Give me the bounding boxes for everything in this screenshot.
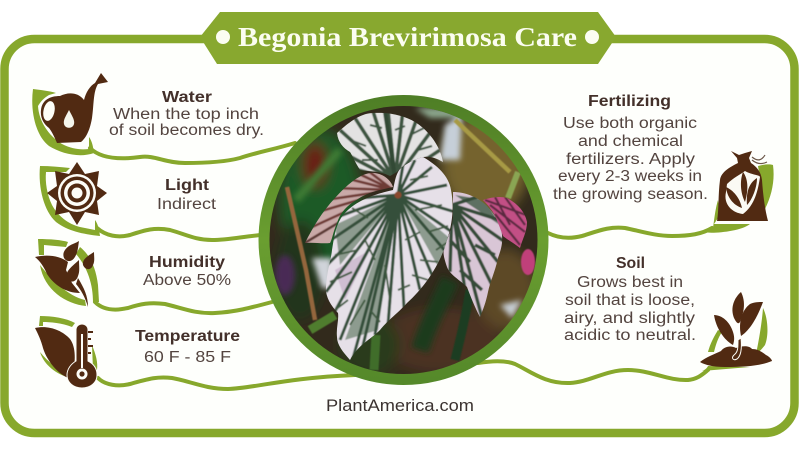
sprout leaf: right <box>740 302 763 336</box>
heading: Fertilizing <box>588 93 671 110</box>
drop 2 <box>67 260 79 282</box>
central plant photo <box>258 95 548 385</box>
green leaf outline <box>40 166 100 236</box>
wave: soil <box>478 361 708 383</box>
stem <box>76 278 88 307</box>
body: 60 F - 85 F <box>144 349 231 366</box>
text: soil: soil that is loose, <box>565 292 695 309</box>
leaf <box>35 327 75 378</box>
text: light <box>157 177 217 213</box>
leaf: main <box>326 157 453 360</box>
text: fertilizing: the growing season. <box>553 186 708 203</box>
green leaf outline <box>704 164 774 233</box>
sack rope <box>752 155 767 164</box>
wave: temperature <box>98 375 355 389</box>
green leaf outline <box>39 316 97 378</box>
banner dot left <box>216 30 230 44</box>
photo stems <box>287 120 518 370</box>
leaf: pink lower <box>521 249 535 275</box>
leaf <box>35 256 80 293</box>
leaf: pink <box>483 197 527 248</box>
text: fertilizing: every 2-3 weeks in <box>558 168 702 185</box>
water drop <box>64 110 74 128</box>
text: fertilizing: fertilizers. Apply <box>566 151 695 168</box>
can body <box>41 73 108 143</box>
photo ring <box>264 101 542 379</box>
wave: water <box>90 143 295 163</box>
wave: light <box>97 228 262 240</box>
wave: humidity <box>95 302 272 313</box>
icon: temperature <box>35 316 97 388</box>
leaf veins <box>326 160 455 362</box>
body: Above 50% <box>143 272 231 289</box>
green leaf outline <box>32 89 94 155</box>
thermometer <box>67 324 97 388</box>
text: humidity <box>143 254 231 289</box>
text: soil <box>564 255 696 344</box>
body: Use both organic <box>563 115 697 132</box>
title banner <box>200 12 616 64</box>
text: fertilizing: and chemical <box>578 133 683 150</box>
sprout leaf: left <box>714 315 734 345</box>
green leaf outline <box>702 308 767 371</box>
drop 3 <box>83 252 94 269</box>
plant leaves <box>726 172 757 208</box>
website credit: PlantAmerica.com <box>326 396 474 415</box>
can handle hole <box>42 100 56 122</box>
banner shape <box>200 12 616 64</box>
heading: Soil <box>616 255 645 272</box>
white plant patch <box>725 171 760 214</box>
leaf center <box>394 192 402 198</box>
sun rings <box>58 174 96 212</box>
body: Indirect <box>157 196 217 213</box>
icon: humidity <box>35 239 99 307</box>
icon: sun <box>40 162 107 236</box>
heading: Humidity <box>149 254 225 271</box>
banner dot right <box>585 30 599 44</box>
icon: soil sprout <box>700 292 772 371</box>
heading: Light <box>165 177 210 194</box>
photo background blobs <box>270 106 538 374</box>
text: temperature <box>135 328 240 366</box>
body: Grows best in <box>577 274 683 291</box>
leaf: upper <box>337 112 443 176</box>
photo scene <box>270 106 538 374</box>
wave: fertilizing <box>548 228 712 238</box>
thermometer bulb and tube <box>81 334 83 368</box>
thermometer ticks <box>88 331 93 354</box>
leaf: left pink <box>305 172 393 244</box>
green leaf outline <box>38 239 99 306</box>
icon: water can <box>32 73 108 155</box>
text: soil: acidic to neutral. <box>564 327 696 344</box>
text: water: of soil becomes dry. <box>109 122 264 139</box>
heading: Temperature <box>135 328 240 345</box>
drop 1 <box>63 241 79 261</box>
body: When the top inch <box>113 106 259 123</box>
sprout leaf: top <box>732 292 744 323</box>
leaf: right <box>444 192 502 317</box>
icon: fertilizer sack <box>704 151 774 233</box>
title: Begonia Brevirimosa Care <box>238 22 577 52</box>
heading: Water <box>162 89 212 106</box>
connector waves <box>90 143 712 389</box>
text: water <box>109 89 264 139</box>
leaf grey-green patches <box>335 195 452 340</box>
sprout stem <box>733 338 741 360</box>
soil mound <box>700 346 772 367</box>
sun rays <box>47 162 107 225</box>
photo background details <box>275 108 522 350</box>
text: fertilizing <box>553 93 708 203</box>
text: soil: airy, and slightly <box>564 310 695 327</box>
sack <box>717 151 768 221</box>
